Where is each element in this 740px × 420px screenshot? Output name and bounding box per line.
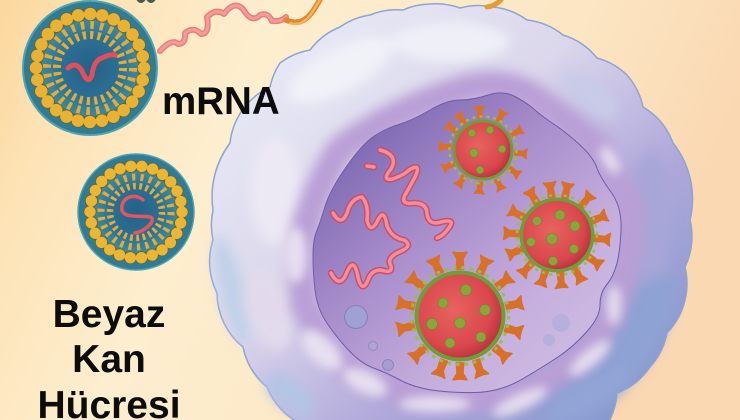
cavity vesicles bbox=[344, 306, 570, 370]
line: Kan: Kan bbox=[72, 338, 146, 381]
lipid tails bbox=[110, 186, 162, 238]
core bbox=[95, 171, 177, 253]
lipid tails bbox=[57, 35, 123, 101]
orange strand top right bbox=[487, 0, 503, 7]
icon: top edge marks bbox=[137, 0, 155, 2]
strand 1 bbox=[367, 150, 451, 238]
lipid heads bbox=[90, 166, 182, 258]
lipid nanoparticle large bbox=[23, 1, 157, 135]
outer shell bbox=[23, 1, 157, 135]
mRNA inside bbox=[68, 55, 115, 80]
lilac band around cavity bbox=[303, 85, 630, 398]
icon: virus top bbox=[439, 106, 527, 194]
line: Beyaz: Beyaz bbox=[53, 293, 165, 336]
cloud highlights around cavity bbox=[285, 143, 624, 420]
strand 2 bbox=[331, 197, 408, 286]
mRNA strand leaving nanoparticle bbox=[160, 5, 286, 51]
label: mRNA: mRNA bbox=[162, 80, 280, 123]
white blood cell bbox=[207, 4, 692, 420]
cell surface shading bbox=[207, 22, 685, 420]
icon: virus right bbox=[504, 181, 611, 289]
label: Beyaz Kan Hücresi bbox=[37, 293, 181, 420]
lipid heads bbox=[36, 14, 144, 122]
cell body bbox=[210, 4, 692, 420]
core bbox=[42, 20, 138, 116]
mRNA inside bbox=[122, 196, 152, 233]
outer shell bbox=[78, 154, 194, 270]
mRNA strands in the cell bbox=[331, 150, 451, 286]
orange strand top left bbox=[286, 0, 322, 24]
lipid nanoparticle small bbox=[78, 154, 194, 270]
cell cavity bbox=[313, 93, 621, 393]
icon: virus bottom bbox=[396, 252, 524, 380]
